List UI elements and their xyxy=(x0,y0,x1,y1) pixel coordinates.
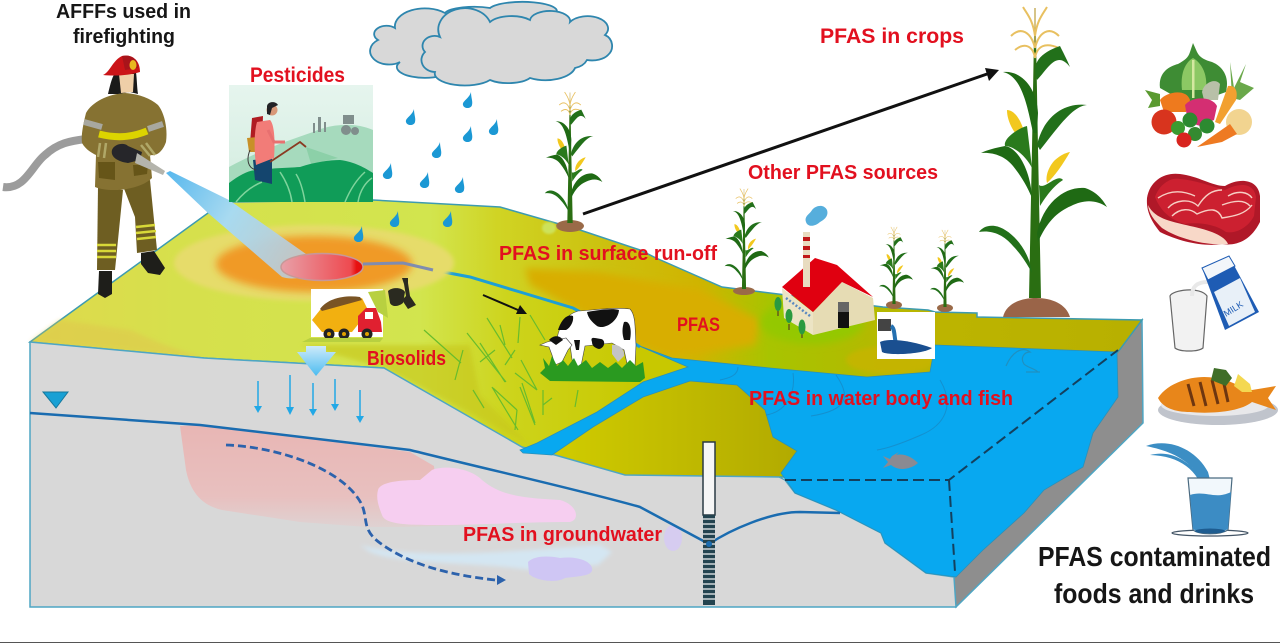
label: Biosolids: Biosolids xyxy=(367,348,446,370)
coat xyxy=(82,93,167,190)
heading: PFAS contaminated foods and drinks: foods and drinks xyxy=(1054,578,1254,609)
lake and stream water xyxy=(520,345,1118,577)
light pink plume blob xyxy=(377,468,576,525)
smoke xyxy=(806,206,827,226)
corn plants xyxy=(542,7,1107,317)
label: PFAS in crops: PFAS in crops xyxy=(820,25,964,48)
roof xyxy=(782,258,873,312)
icon: effluent pipe discharge xyxy=(877,312,935,359)
corn plant right two xyxy=(930,230,964,312)
right side face of block xyxy=(950,320,1143,607)
label: Pesticides: Pesticides xyxy=(250,64,345,87)
pale blue plume fringe xyxy=(360,545,612,570)
corn plant small left xyxy=(542,92,602,234)
icon: bucket and shovel xyxy=(388,278,416,309)
heading: AFFFs used in firefighting: firefighting xyxy=(73,25,175,48)
icon: glass of water xyxy=(1146,443,1248,536)
chimney xyxy=(803,232,810,288)
heading: PFAS contaminated foods and drinks xyxy=(1038,541,1271,609)
icon: factory xyxy=(774,206,875,338)
nozzle xyxy=(135,153,165,175)
icon: biosolids truck xyxy=(302,289,388,342)
grass tuft xyxy=(540,356,645,382)
grass twigs xyxy=(424,315,578,430)
helmet xyxy=(103,56,140,76)
face xyxy=(119,74,134,93)
heading: AFFFs used in firefighting xyxy=(56,0,191,48)
groundwater plume xyxy=(30,346,840,605)
food icons xyxy=(1145,43,1278,536)
legs xyxy=(97,186,123,270)
label: PFAS in groundwater: PFAS in groundwater xyxy=(463,524,662,546)
icon: contamination zone and spray target xyxy=(166,171,454,301)
icon: grazing cow xyxy=(540,308,645,382)
arrow: runoff direction xyxy=(483,295,527,314)
side wall xyxy=(782,288,813,335)
fire hose xyxy=(3,139,86,187)
label: PFAS: PFAS xyxy=(677,315,720,336)
heading: AFFFs used in firefighting: AFFFs used in xyxy=(56,0,191,23)
wave icon xyxy=(1006,350,1040,372)
grey subsurface front face xyxy=(30,342,956,607)
water table marker xyxy=(43,392,68,408)
rain drops xyxy=(354,92,498,242)
icon: raw meat xyxy=(1147,174,1260,245)
gable wall xyxy=(813,282,875,335)
icon: firefighter xyxy=(3,56,167,298)
monitoring well xyxy=(703,442,715,605)
lime wedge west of stream xyxy=(384,262,688,449)
rain cloud xyxy=(370,2,612,86)
block diagram: landscape cross-section xyxy=(30,200,1143,607)
golden slope patch xyxy=(525,268,760,357)
bottom rule xyxy=(0,642,1280,643)
icon: grilled fish on plate xyxy=(1158,368,1278,425)
icon: pesticide spraying scene xyxy=(229,85,373,202)
pink contaminant plume xyxy=(180,425,470,527)
dashed lake outline xyxy=(785,350,1118,572)
dashed flow path arrow xyxy=(226,445,506,585)
farmer xyxy=(247,102,306,184)
fish in lake xyxy=(883,452,918,469)
corn plant by factory xyxy=(725,189,769,295)
label: PFAS in surface run-off: PFAS in surface run-off xyxy=(499,243,717,265)
icon: vegetables xyxy=(1145,43,1254,148)
corn plant right one xyxy=(879,227,913,309)
label: Other PFAS sources: Other PFAS sources xyxy=(748,161,938,184)
land south of stream xyxy=(552,381,797,477)
icon: milk glass and carton xyxy=(1170,256,1259,351)
tractor xyxy=(313,115,359,135)
land surface xyxy=(30,200,1142,480)
water contour lines xyxy=(720,367,947,450)
lawn around factory xyxy=(760,300,864,344)
milk carton: MILK xyxy=(1222,299,1245,319)
stream from infiltration pond xyxy=(433,270,640,347)
boots xyxy=(98,271,112,298)
reflective bands xyxy=(84,122,163,129)
lavender blobs xyxy=(528,557,592,581)
large corn plant xyxy=(979,7,1107,317)
arrow: uptake to crops xyxy=(583,68,999,214)
trees xyxy=(774,297,806,338)
label: PFAS in water body and fish: PFAS in water body and fish xyxy=(749,388,1013,410)
wide leaching arrow xyxy=(297,346,336,376)
hair xyxy=(108,72,138,94)
gloves xyxy=(112,144,142,163)
water table line xyxy=(30,413,840,544)
infiltration arrows xyxy=(254,375,364,423)
